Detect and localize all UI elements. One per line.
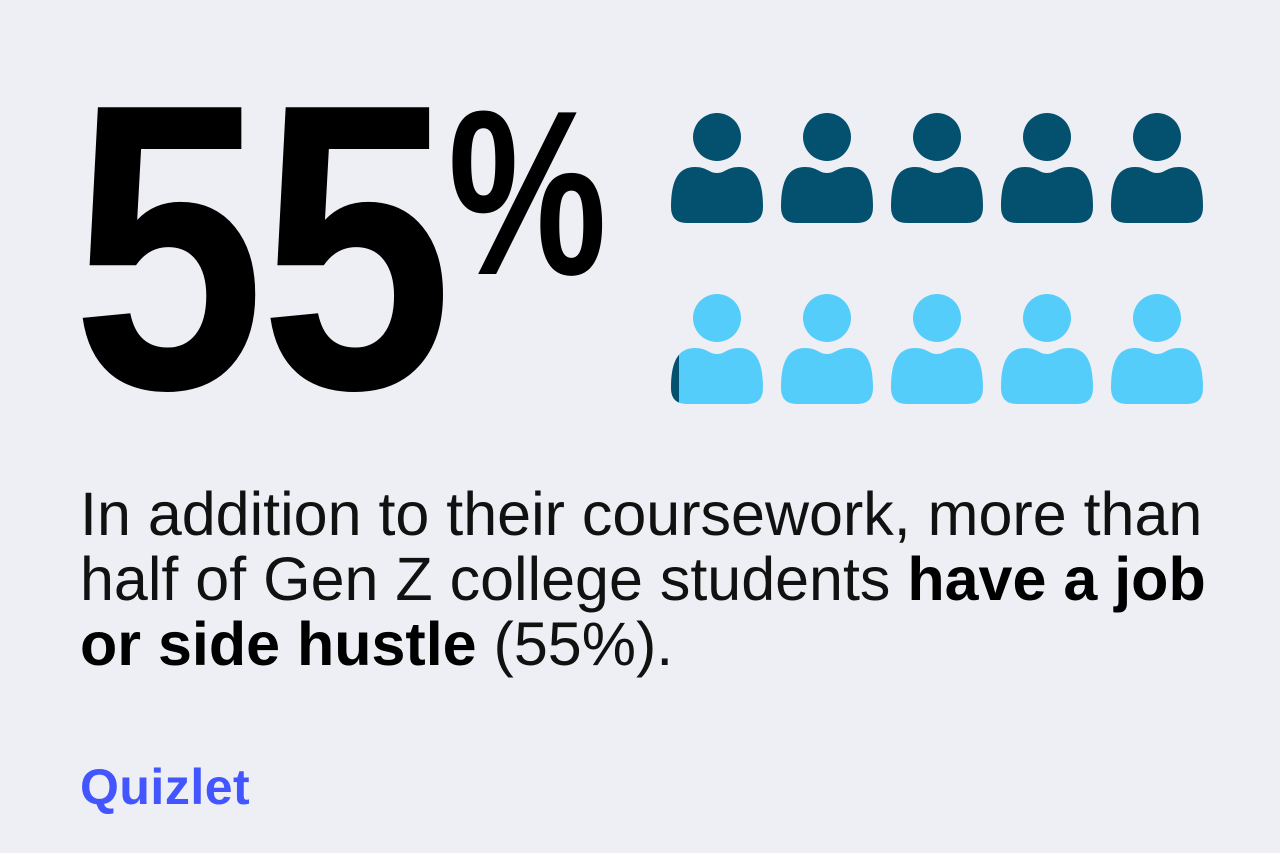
percent sign: % — [448, 61, 607, 324]
description text: half of Gen Z college students have a job — [80, 545, 1206, 613]
partial dark fill on sixth person — [671, 354, 679, 403]
light row of people — [671, 294, 1203, 404]
big number 55: 55 — [72, 20, 448, 475]
dark row of people — [671, 113, 1203, 223]
icon grid: people — [671, 113, 1203, 404]
logo: Quizlet: Quizlet — [80, 759, 250, 815]
description text: or side hustle (55%). — [80, 610, 673, 678]
description text — [80, 480, 1206, 678]
description text: In addition to their coursework, more than — [80, 480, 1202, 548]
